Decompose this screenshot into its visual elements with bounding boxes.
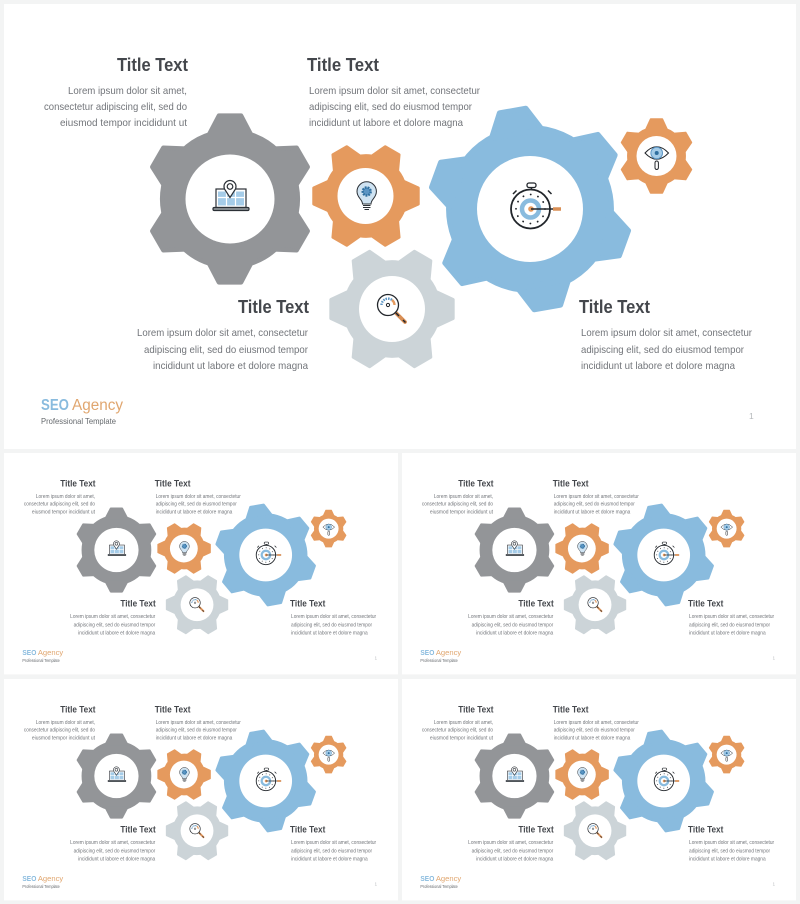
panel: thumbnail top right: Title Text bbox=[458, 478, 494, 488]
panel: thumbnail top right: Title Text bbox=[553, 478, 589, 488]
text block: bottom right bbox=[581, 327, 752, 372]
panel: thumbnail bottom right: consectetur adipiscing elit, sed do bbox=[422, 728, 493, 734]
text block: top middle: incididunt ut labore et dolore magna bbox=[309, 117, 463, 129]
text block: top middle: adipiscing elit, sed do eiusmod tempor bbox=[309, 101, 472, 113]
panel: thumbnail bottom left: Title Text bbox=[155, 704, 191, 714]
panel: main slide bbox=[4, 4, 796, 449]
panel: thumbnail top right: Lorem ipsum dolor sit amet, bbox=[434, 494, 493, 500]
panel: thumbnail bottom right: incididunt ut labore et dolore magna bbox=[554, 736, 630, 742]
panel: thumbnail top left: 1 bbox=[375, 655, 378, 660]
panel: thumbnail top right: Agency bbox=[436, 648, 461, 657]
panel: thumbnail bottom right: adipiscing elit, sed do eiusmod tempor bbox=[472, 849, 553, 855]
panel: thumbnail top left: Lorem ipsum dolor sit amet, bbox=[36, 494, 95, 500]
panel: thumbnail top right: Professional Template bbox=[420, 658, 458, 663]
panel: thumbnail bottom left: consectetur adipiscing elit, sed do bbox=[24, 728, 95, 734]
panel: thumbnail bottom right: Lorem ipsum dolor sit amet, consectetur bbox=[554, 720, 639, 726]
panel: thumbnail bottom right: Professional Template bbox=[420, 884, 458, 889]
heading: top left: Title Text bbox=[117, 55, 188, 75]
heading: bottom middle: Title Text bbox=[238, 297, 309, 317]
panel: thumbnail top left: Title Text bbox=[60, 478, 96, 488]
panel: thumbnail bottom left bbox=[4, 679, 398, 900]
panel: thumbnail bottom left: Lorem ipsum dolor sit amet, consectetur bbox=[70, 840, 155, 846]
panel: thumbnail top left: adipiscing elit, sed do eiusmod tempor bbox=[74, 623, 155, 629]
panel: thumbnail top left: Professional Template bbox=[22, 658, 60, 663]
brand logo: Agency bbox=[72, 397, 123, 414]
panel: thumbnail top right: incididunt ut labore et dolore magna bbox=[554, 510, 630, 516]
text block: bottom right: adipiscing elit, sed do eiusmod tempor bbox=[581, 344, 744, 356]
panel: thumbnail bottom left: 1 bbox=[375, 881, 378, 886]
text block: bottom middle: incididunt ut labore et dolore magna bbox=[153, 360, 308, 372]
panel: thumbnail top left: Lorem ipsum dolor sit amet, consectetur bbox=[291, 614, 376, 620]
panel: thumbnail top left: adipiscing elit, sed do eiusmod tempor bbox=[291, 623, 372, 629]
panel: thumbnail bottom left: Lorem ipsum dolor sit amet, bbox=[36, 720, 95, 726]
panel: thumbnail top left: Lorem ipsum dolor sit amet, consectetur bbox=[156, 494, 241, 500]
text block: top left: Lorem ipsum dolor sit amet, bbox=[68, 85, 187, 97]
gears with icons bbox=[147, 93, 694, 393]
brand logo bbox=[41, 397, 123, 414]
panel: thumbnail top left bbox=[4, 453, 398, 674]
text block: bottom middle: Lorem ipsum dolor sit amet, consectetur bbox=[137, 327, 308, 339]
text block: top middle: Lorem ipsum dolor sit amet, consectetur bbox=[309, 85, 480, 97]
panel: thumbnail top right: Lorem ipsum dolor sit amet, consectetur bbox=[554, 494, 639, 500]
panel: thumbnail top right: SEO bbox=[420, 648, 434, 657]
panel: thumbnail bottom right: adipiscing elit, sed do eiusmod tempor bbox=[554, 728, 635, 734]
panel: thumbnail top right: 1 bbox=[773, 655, 776, 660]
panel: thumbnail bottom left: incididunt ut labore et dolore magna bbox=[291, 857, 368, 863]
panel: thumbnail top left: adipiscing elit, sed do eiusmod tempor bbox=[156, 502, 237, 508]
panel: thumbnail top right: incididunt ut labore et dolore magna bbox=[476, 631, 553, 637]
panel: thumbnail top right: incididunt ut labore et dolore magna bbox=[689, 631, 766, 637]
brand logo: SEO bbox=[41, 397, 69, 414]
panel: thumbnail top right: consectetur adipiscing elit, sed do bbox=[422, 502, 493, 508]
panel: thumbnail top left: consectetur adipiscing elit, sed do bbox=[24, 502, 95, 508]
panel: thumbnail bottom right: incididunt ut labore et dolore magna bbox=[476, 857, 553, 863]
panel: thumbnail bottom right: Agency bbox=[436, 874, 461, 883]
panel: thumbnail bottom left: Lorem ipsum dolor sit amet, consectetur bbox=[291, 840, 376, 846]
panel: thumbnail top right: adipiscing elit, sed do eiusmod tempor bbox=[554, 502, 635, 508]
slide background bbox=[4, 4, 796, 449]
text block: top left: eiusmod tempor incididunt ut bbox=[60, 117, 187, 129]
panel: thumbnail top right: Title Text bbox=[688, 599, 723, 609]
panel: thumbnail top left: incididunt ut labore et dolore magna bbox=[78, 631, 155, 637]
text block: bottom middle bbox=[137, 327, 308, 372]
panel: thumbnail bottom left: Title Text bbox=[60, 704, 96, 714]
panel: thumbnail bottom right: Title Text bbox=[458, 704, 494, 714]
panel: thumbnail top right: Lorem ipsum dolor sit amet, consectetur bbox=[468, 614, 553, 620]
panel: thumbnail top left: Title Text bbox=[290, 599, 325, 609]
panel: thumbnail bottom right: Lorem ipsum dolor sit amet, bbox=[434, 720, 493, 726]
panel: thumbnail bottom left: incididunt ut labore et dolore magna bbox=[78, 857, 155, 863]
text block: bottom right: incididunt ut labore et dolore magna bbox=[581, 360, 735, 372]
panel: thumbnail top left: Title Text bbox=[120, 599, 156, 609]
panel: thumbnail bottom left: Agency bbox=[38, 874, 63, 883]
panel: thumbnail bottom right: Title Text bbox=[688, 825, 723, 835]
panel: thumbnail bottom left: adipiscing elit, sed do eiusmod tempor bbox=[74, 849, 155, 855]
text block: top left bbox=[44, 85, 187, 129]
panel: thumbnail top right: Lorem ipsum dolor sit amet, consectetur bbox=[689, 614, 774, 620]
panel: thumbnail bottom right: adipiscing elit, sed do eiusmod tempor bbox=[689, 849, 770, 855]
panel: thumbnail bottom left: adipiscing elit, sed do eiusmod tempor bbox=[156, 728, 237, 734]
panel: thumbnail bottom left: Title Text bbox=[120, 825, 156, 835]
panel: thumbnail top left: incididunt ut labore et dolore magna bbox=[156, 510, 232, 516]
panel: thumbnail bottom right: Title Text bbox=[518, 825, 554, 835]
text block: top middle bbox=[309, 85, 480, 129]
panel: thumbnail top right: eiusmod tempor incididunt ut bbox=[430, 510, 494, 516]
panel: thumbnail bottom right: Lorem ipsum dolor sit amet, consectetur bbox=[468, 840, 553, 846]
panel: thumbnail top left: Title Text bbox=[155, 478, 191, 488]
panel: thumbnail bottom left: adipiscing elit, sed do eiusmod tempor bbox=[291, 849, 372, 855]
panel: thumbnail bottom right: SEO bbox=[420, 874, 434, 883]
panel: thumbnail top right: adipiscing elit, sed do eiusmod tempor bbox=[472, 623, 553, 629]
panel: thumbnail top right: Title Text bbox=[518, 599, 554, 609]
heading: top middle: Title Text bbox=[307, 55, 379, 75]
page number: 1 bbox=[749, 411, 754, 421]
panel: thumbnail top left: Agency bbox=[38, 648, 63, 657]
panel: thumbnail top left: SEO bbox=[22, 648, 36, 657]
panel: thumbnail top right bbox=[402, 453, 796, 674]
panel: thumbnail top right: adipiscing elit, sed do eiusmod tempor bbox=[689, 623, 770, 629]
panel: thumbnail top left: incididunt ut labore et dolore magna bbox=[291, 631, 368, 637]
panel: thumbnail bottom right bbox=[402, 679, 796, 900]
panel: thumbnail bottom left: SEO bbox=[22, 874, 36, 883]
panel: thumbnail top left: eiusmod tempor incididunt ut bbox=[32, 510, 96, 516]
text block: bottom right: Lorem ipsum dolor sit amet, consectetur bbox=[581, 327, 752, 339]
panel: thumbnail bottom left: Lorem ipsum dolor sit amet, consectetur bbox=[156, 720, 241, 726]
panel: thumbnail bottom right: eiusmod tempor incididunt ut bbox=[430, 736, 494, 742]
panel: thumbnail bottom left: incididunt ut labore et dolore magna bbox=[156, 736, 232, 742]
text block: bottom middle: adipiscing elit, sed do eiusmod tempor bbox=[144, 344, 308, 356]
text block: top left: consectetur adipiscing elit, sed do bbox=[44, 101, 187, 113]
brand tagline: Professional Template bbox=[41, 416, 116, 426]
heading: bottom right: Title Text bbox=[579, 297, 650, 317]
panel: thumbnail bottom left: Professional Template bbox=[22, 884, 60, 889]
panel: thumbnail bottom right: Lorem ipsum dolor sit amet, consectetur bbox=[689, 840, 774, 846]
panel: thumbnail bottom right: 1 bbox=[773, 881, 776, 886]
panel: thumbnail top left: Lorem ipsum dolor sit amet, consectetur bbox=[70, 614, 155, 620]
panel: thumbnail bottom right: incididunt ut labore et dolore magna bbox=[689, 857, 766, 863]
panel: thumbnail bottom left: Title Text bbox=[290, 825, 325, 835]
panel: thumbnail bottom right: Title Text bbox=[553, 704, 589, 714]
panel: thumbnail bottom left: eiusmod tempor incididunt ut bbox=[32, 736, 96, 742]
